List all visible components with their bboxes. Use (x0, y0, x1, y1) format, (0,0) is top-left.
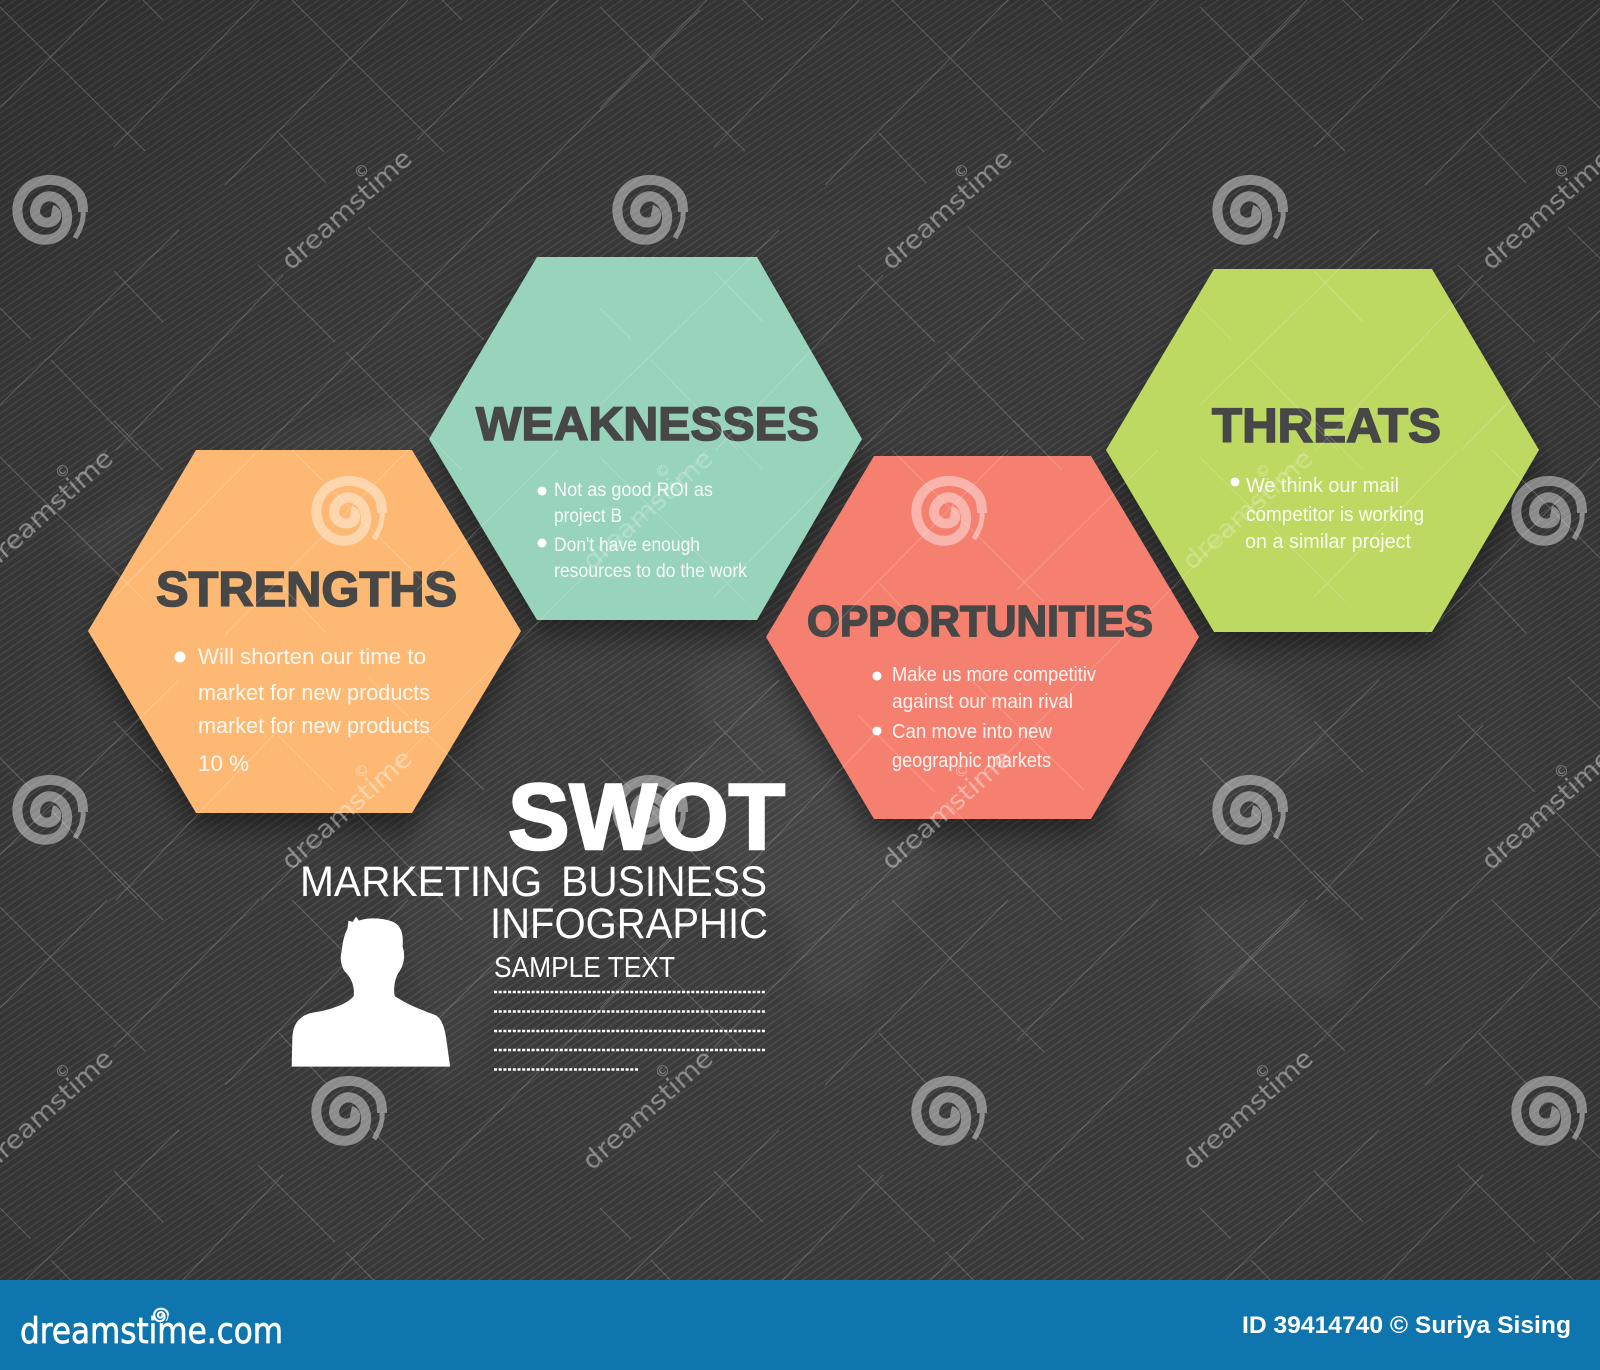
panel: weaknesses: Don't have enough (554, 535, 700, 556)
text block: sample text with dotted lines (494, 952, 766, 1070)
panel: strengths: STRENGTHS (156, 563, 457, 617)
watermark: dreamstime text: © (350, 159, 373, 183)
footer bar: ID 39414740 © Suriya Sising (1242, 1312, 1571, 1339)
watermark: dreamstime text: © (950, 159, 973, 183)
hexagon shadows (88, 273, 1539, 835)
title: INFOGRAPHIC (490, 900, 768, 948)
panel: weaknesses: resources to do the work (554, 561, 747, 582)
panel: weaknesses: WEAKNESSES (476, 397, 819, 450)
panel: opportunities (766, 456, 1199, 819)
panel: threats: competitor is working (1246, 504, 1424, 526)
panel: opportunities: against our main rival (892, 691, 1073, 713)
title (300, 764, 785, 948)
watermark: dreamstime text: dreamstime (1177, 1044, 1319, 1176)
panel: weaknesses (429, 257, 862, 620)
footer bar (0, 1280, 1600, 1370)
panel: opportunities: Make us more competitiv (892, 664, 1096, 686)
panel: strengths: 10 % (198, 751, 249, 776)
panel: weaknesses: project B (554, 506, 622, 527)
panel: strengths: Will shorten our time to (198, 644, 426, 669)
watermark: dreamstime text: dreamstime (876, 144, 1018, 276)
panel: opportunities: Can move into new (892, 721, 1053, 743)
watermark: dreamstime text: © (1251, 1059, 1274, 1083)
watermark: dreamstime text: © (1251, 459, 1274, 483)
watermark: dreamstime text: © (950, 759, 973, 783)
panel: threats: THREATS (1212, 400, 1441, 453)
world map silhouette (60, 390, 1350, 1090)
watermark: dreamstime text: © (651, 459, 674, 483)
text block: sample text with dotted lines: SAMPLE TEXT (494, 952, 675, 984)
watermark: dreamstime text: © (51, 1059, 74, 1083)
watermark: dreamstime text: © (350, 759, 373, 783)
watermark: dreamstime text: dreamstime (876, 744, 1018, 876)
panel: threats: on a similar project (1245, 531, 1411, 553)
icon: person silhouette (292, 917, 450, 1067)
panel: threats: We think our mail (1246, 475, 1399, 497)
watermark: spirals (17, 180, 1582, 1141)
watermark: dreamstime text: dreamstime (577, 444, 719, 576)
watermark: dreamstime text: © (51, 459, 74, 483)
watermark: dreamstime text (0, 134, 1600, 1176)
watermark: dreamstime text: dreamstime (1177, 444, 1319, 576)
watermark: dreamstime text: © (1550, 759, 1573, 783)
panel: opportunities: OPPORTUNITIES (807, 598, 1153, 646)
watermark: dreamstime text: dreamstime (276, 744, 418, 876)
watermark: dreamstime text: © (1550, 159, 1573, 183)
watermark: dreamstime text: © (651, 1059, 674, 1083)
panel: threats (1106, 269, 1539, 632)
footer bar: dreamstime.com (20, 1311, 283, 1352)
watermark: dreamstime text: dreamstime (276, 144, 418, 276)
panel: strengths (88, 450, 521, 813)
title: MARKETING BUSINESS (300, 858, 767, 906)
title: SWOT (508, 764, 785, 869)
panel: weaknesses: Not as good ROI as (554, 480, 713, 501)
watermark: dreamstime text: dreamstime (577, 1044, 719, 1176)
panel: opportunities: geographic markets (892, 750, 1051, 772)
panel: strengths: market for new products (198, 680, 430, 705)
panel: strengths: market for new products (198, 713, 430, 738)
